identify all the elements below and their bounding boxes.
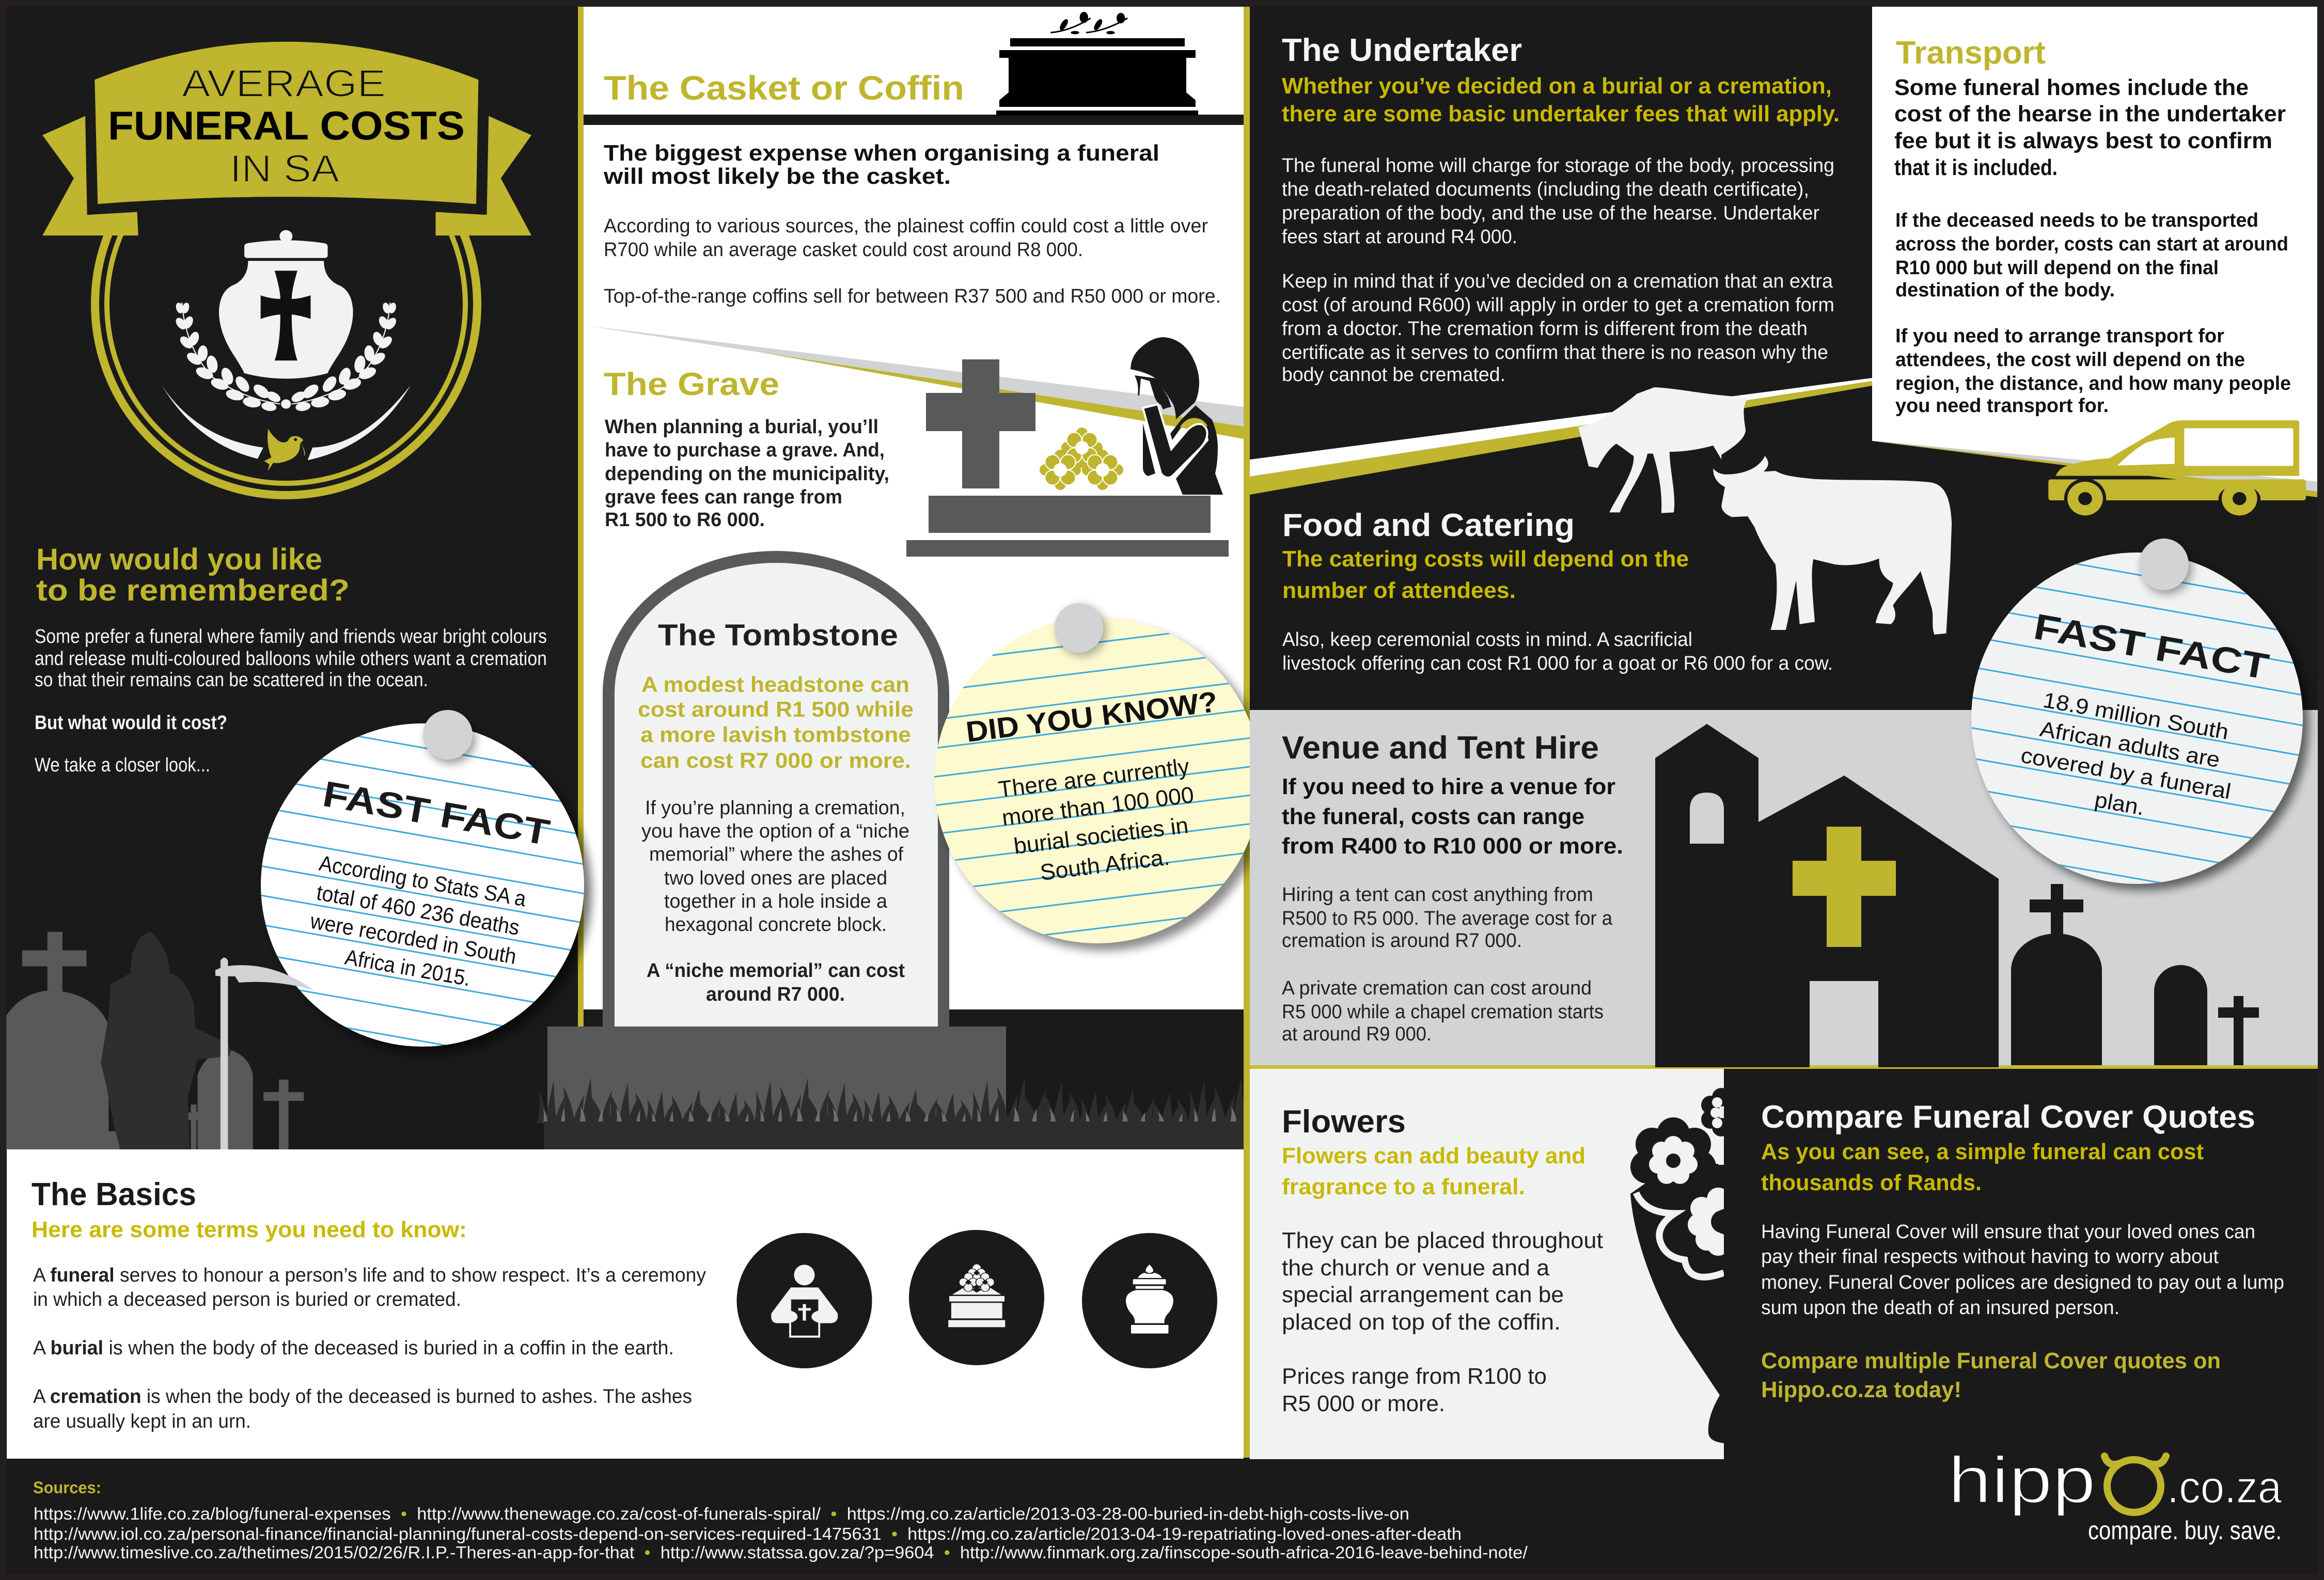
definitions text: in which a deceased person is buried or cremated. [33,1289,461,1310]
definitions text: A burial is when the body of the deceased is buried in a coffin in the earth. [33,1337,674,1359]
compare body text: sum upon the death of an insured person. [1761,1297,2119,1319]
sources: http://www.timeslive.co.za/thetimes/2015/02/26/R.I.P.-Theres-an-app-for-that • http://www.statssa.gov.za/?p=9604 • http://www.finmark.org.za/finscope-south-africa-2016-leave-behind-note/ [34,1543,1528,1562]
logo: hippo.co.za: .co.za [2167,1462,2282,1512]
definitions text [33,1265,706,1432]
flowers text: Flowers can add beauty and [1282,1143,1585,1168]
venue text: R5 000 while a chapel cremation starts [1282,1001,1604,1023]
icon: cow [1713,456,1952,635]
tombstone highlight text: cost around R1 500 while [638,697,914,721]
icon: pin [2139,539,2192,594]
tombstone highlight text [638,672,914,772]
call to action: Hippo.co.za today! [1761,1377,1961,1402]
diagonal ribbon: grave section [584,325,1244,439]
panel: fast fact note, funeral plan [1971,539,2316,896]
tombstone body text: If you’re planning a cremation, [645,797,905,819]
sources: Sources: [33,1478,101,1497]
logo: hippo.co.za [1948,1443,2282,1545]
transport text: If the deceased needs to be transported [1895,210,2258,231]
title: AVERAGE [182,62,386,105]
flowers text: They can be placed throughout [1282,1228,1603,1253]
text block: undertaker: the death-related documents (including the death certificate), [1282,179,1809,200]
text block: grave: When planning a burial, you’ll [605,416,878,438]
definitions text: are usually kept in an urn. [33,1411,251,1432]
panel: venue and tent hire [1250,710,2318,1069]
transport text: fee but it is always best to confirm [1894,128,2272,153]
flowers text: fragrance to a funeral. [1282,1174,1525,1199]
flowers text: placed on top of the coffin. [1282,1309,1561,1335]
panel: compare funeral cover quotes [1724,1069,2318,1574]
panel: did you know note: more than 100 000 [1000,782,1195,831]
panel: fast fact note, deaths: were recorded in South [308,908,518,969]
tombstone body text: together in a hole inside a [664,891,888,912]
icon: mourning woman [1130,337,1223,495]
text block: undertaker: fees start at around R4 000. [1282,226,1517,248]
heading: Venue and Tent Hire: Venue and Tent Hire [1282,730,1599,766]
text block: food and catering: Also, keep ceremonial costs in mind. A sacrificial [1282,629,1692,651]
transport text: cost of the hearse in the undertaker [1894,101,2286,127]
text block: undertaker: from a doctor. The cremation form is different from the death [1282,318,1808,340]
heading: how would you like to be remembered: to be remembered? [36,574,350,607]
icon: grave flowers [1040,428,1123,490]
panel: tombstone [603,551,949,1026]
venue text: R500 to R5 000. The average cost for a [1282,908,1613,929]
panel: fast fact note, deaths [261,710,598,1053]
tombstone body text: around R7 000. [706,984,845,1005]
text block: casket: According to various sources, the plainest coffin could cost a little over [604,215,1208,237]
icon: gravestones [2011,884,2259,1065]
text block: undertaker: body cannot be cremated. [1282,364,1505,386]
icon: urn [1082,1233,1217,1368]
call to action: Compare multiple Funeral Cover quotes on [1761,1348,2221,1373]
compare body text: pay their final respects without having to worry about [1761,1246,2219,1268]
tombstone body text: hexagonal concrete block. [665,914,887,936]
compare body text [1761,1221,2284,1319]
transport text: you need transport for. [1895,395,2109,417]
subheading: undertaker fees: there are some basic undertaker fees that will apply. [1282,101,1840,127]
text block: grave: grave fees can range from [605,486,842,508]
transport text: region, the distance, and how many people [1895,373,2291,394]
text block: casket: Top-of-the-range coffins sell for between R37 500 and R50 000 or more. [604,286,1221,307]
transport text: destination of the body. [1895,279,2115,301]
flowers text [1282,1143,1603,1416]
text block: undertaker: certificate as it serves to confirm that there is no reason why the [1282,342,1828,364]
heading: Transport: Transport [1896,35,2046,71]
tombstone body text: memorial” where the ashes of [649,844,903,865]
icon: flowers on coffin [909,1230,1044,1365]
heading: how would you like to be remembered [36,543,350,607]
text block: intro: Some prefer a funeral where family and friends wear bright colours [35,626,547,647]
ground strip with headstone plinth [537,1009,1244,1149]
tombstone body text: you have the option of a “niche [641,820,909,842]
text block: undertaker: cost (of around R600) will apply in order to get a cremation form [1282,294,1834,316]
venue text: the funeral, costs can range [1282,804,1584,829]
panel: did you know note: There are currently [997,754,1190,802]
text block: casket: The biggest expense when organising a funeral [604,140,1159,166]
title: IN SA [230,147,340,190]
text block: intro: But what would it cost? [35,712,227,734]
icon: pin [423,710,476,764]
text block: food and catering: The catering costs will depend on the [1282,546,1689,572]
diagonal ribbon: food section [1250,378,1872,495]
icon: casket with flowers [996,12,1198,116]
title: FUNERAL COSTS [108,103,465,148]
tombstone body text: A “niche memorial” can cost [647,960,905,982]
logo: hippo.co.za: hipp [1948,1443,2096,1516]
sources: http://www.iol.co.za/personal-finance/financial-planning/funeral-costs-depend-on-services-required-1475631 • https://mg.co.za/article/2013-04-19-repatriating-loved-ones-after-death [34,1524,1462,1543]
subheading: terms: Here are some terms you need to know: [32,1217,467,1242]
icon: grave with cross [906,359,1229,557]
flowers text: the church or venue and a [1282,1255,1550,1281]
panel: did you know note: South Africa. [1039,845,1171,886]
text block: casket [603,140,1221,307]
heading: how would you like to be remembered: How would you like [36,543,322,576]
text block: intro: and release multi-coloured balloons while others want a cremation [35,648,547,670]
title [108,62,465,190]
text block: food and catering: number of attendees. [1282,578,1516,603]
venue text: A private cremation can cost around [1282,977,1592,999]
text block: intro: so that their remains can be scattered in the ocean. [35,669,428,691]
compare body text: Having Funeral Cover will ensure that your loved ones can [1761,1221,2255,1243]
subheading: undertaker fees: Whether you’ve decided on a burial or a cremation, [1282,73,1832,99]
compare body text: money. Funeral Cover polices are designed to pay out a lump [1761,1272,2284,1293]
panel: casket, grave and tombstone column [578,7,1250,1458]
panel: fast fact note, deaths: total of 460 236 deaths [315,880,522,940]
tombstone body text [641,797,909,1005]
text block: undertaker: Keep in mind that if you’ve decided on a cremation that an extra [1282,271,1833,292]
subheading: undertaker fees [1282,73,1840,127]
text block: intro: We take a closer look... [35,754,210,776]
venue text: cremation is around R7 000. [1282,930,1522,952]
tombstone highlight text: A modest headstone can [641,672,909,697]
panel: transport [1872,7,2317,497]
text block: undertaker: preparation of the body, and the use of the hearse. Undertaker [1282,202,1819,224]
panel: fast fact note, funeral plan: African adults are [2038,717,2222,772]
panel: flowers [1250,1069,1724,1459]
icon: urn with laurel and dove [162,230,411,473]
text block: grave: depending on the municipality, [605,463,889,485]
panel: fast fact note, funeral plan: FAST FACT [2031,606,2272,687]
text block: intro [35,626,547,776]
icon: hearse [2048,420,2306,519]
icon: church [1655,724,1999,1067]
text block: grave: have to purchase a grave. And, [605,439,885,461]
transport text: If you need to arrange transport for [1895,325,2224,347]
compare subheading: thousands of Rands. [1761,1170,1982,1195]
compare subheading: As you can see, a simple funeral can cost [1761,1139,2204,1164]
heading: The Grave: The Grave [604,367,779,402]
transport text: R10 000 but will depend on the final [1895,257,2219,279]
heading: Food and Catering: Food and Catering [1282,508,1575,543]
text block: food and catering: livestock offering can cost R1 000 for a goat or R6 000 for a cow. [1282,653,1833,674]
flowers text: Prices range from R100 to [1282,1364,1547,1389]
tombstone body text: two loved ones are placed [664,867,887,889]
transport text: that it is included. [1894,155,2058,180]
panel: fast fact note, funeral plan: covered by a funeral [2019,743,2233,803]
title banner badge [42,42,531,495]
heading: Compare Funeral Cover Quotes: Compare Funeral Cover Quotes [1761,1099,2255,1135]
venue text: at around R9 000. [1282,1023,1432,1045]
icon: goat [1578,387,1749,513]
transport text: across the border, costs can start at around [1895,233,2288,255]
transport text [1894,75,2291,417]
panel: fast fact note, deaths: According to Stats SA a [317,851,528,911]
graveyard scene with reaper [6,931,304,1150]
icon: bouquet [1630,1088,1734,1443]
sources [33,1478,1528,1562]
transport text: Some funeral homes include the [1894,75,2249,100]
venue text: from R400 to R10 000 or more. [1282,833,1623,859]
text block: food and catering [1282,546,1833,674]
icon: scythe [215,957,314,1150]
logo: hippo.co.za: compare. buy. save. [2088,1516,2282,1545]
panel: fast fact note, funeral plan: 18.9 million South [2041,688,2231,744]
icon: priest [736,1233,872,1368]
venue text [1282,774,1623,1045]
venue text: Hiring a tent can cost anything from [1282,884,1593,906]
transport text: attendees, the cost will depend on the [1895,349,2245,371]
text block: grave: R1 500 to R6 000. [605,509,765,531]
panel: did you know note [934,601,1250,957]
compare subheading [1761,1139,2204,1195]
text block: grave [605,416,889,531]
panel: did you know note: burial societies in [1012,813,1190,859]
heading: The Undertaker: The Undertaker [1282,33,1522,68]
tombstone highlight text: a more lavish tombstone [640,722,911,747]
call to action [1761,1348,2221,1402]
panel: fast fact note, funeral plan: plan. [2093,787,2146,820]
panel: did you know note: DID YOU KNOW? [964,685,1219,748]
text block: undertaker [1282,155,1834,386]
heading: Flowers: Flowers [1282,1104,1406,1140]
flowers text: R5 000 or more. [1282,1391,1445,1416]
panel: the basics [7,1149,1244,1459]
icon: pin [1055,603,1106,656]
panel: fast fact note, deaths: Africa in 2015. [343,945,473,991]
definitions text: A funeral serves to honour a person’s life and to show respect. It’s a ceremony [33,1265,706,1286]
definitions text: A cremation is when the body of the deceased is burned to ashes. The ashes [33,1386,692,1408]
text block: undertaker: The funeral home will charge for storage of the body, processing [1282,155,1834,177]
text block: casket: R700 while an average casket could cost around R8 000. [604,239,1083,261]
flowers text: special arrangement can be [1282,1282,1564,1307]
sources: https://www.1life.co.za/blog/funeral-expenses • http://www.thenewage.co.za/cost-of-funerals-spiral/ • https://mg.co.za/article/2013-03-28-00-buried-in-debt-high-costs-live-on [34,1504,1409,1523]
panel: fast fact note, deaths: FAST FACT [320,773,553,853]
heading: The Basics: The Basics [32,1177,196,1212]
text block: casket: will most likely be the casket. [603,164,951,189]
heading: The Tombstone: The Tombstone [658,619,898,652]
heading: The Casket or Coffin: The Casket or Coffin [604,69,964,107]
tombstone highlight text: can cost R7 000 or more. [640,748,911,772]
venue text: If you need to hire a venue for [1282,774,1615,799]
